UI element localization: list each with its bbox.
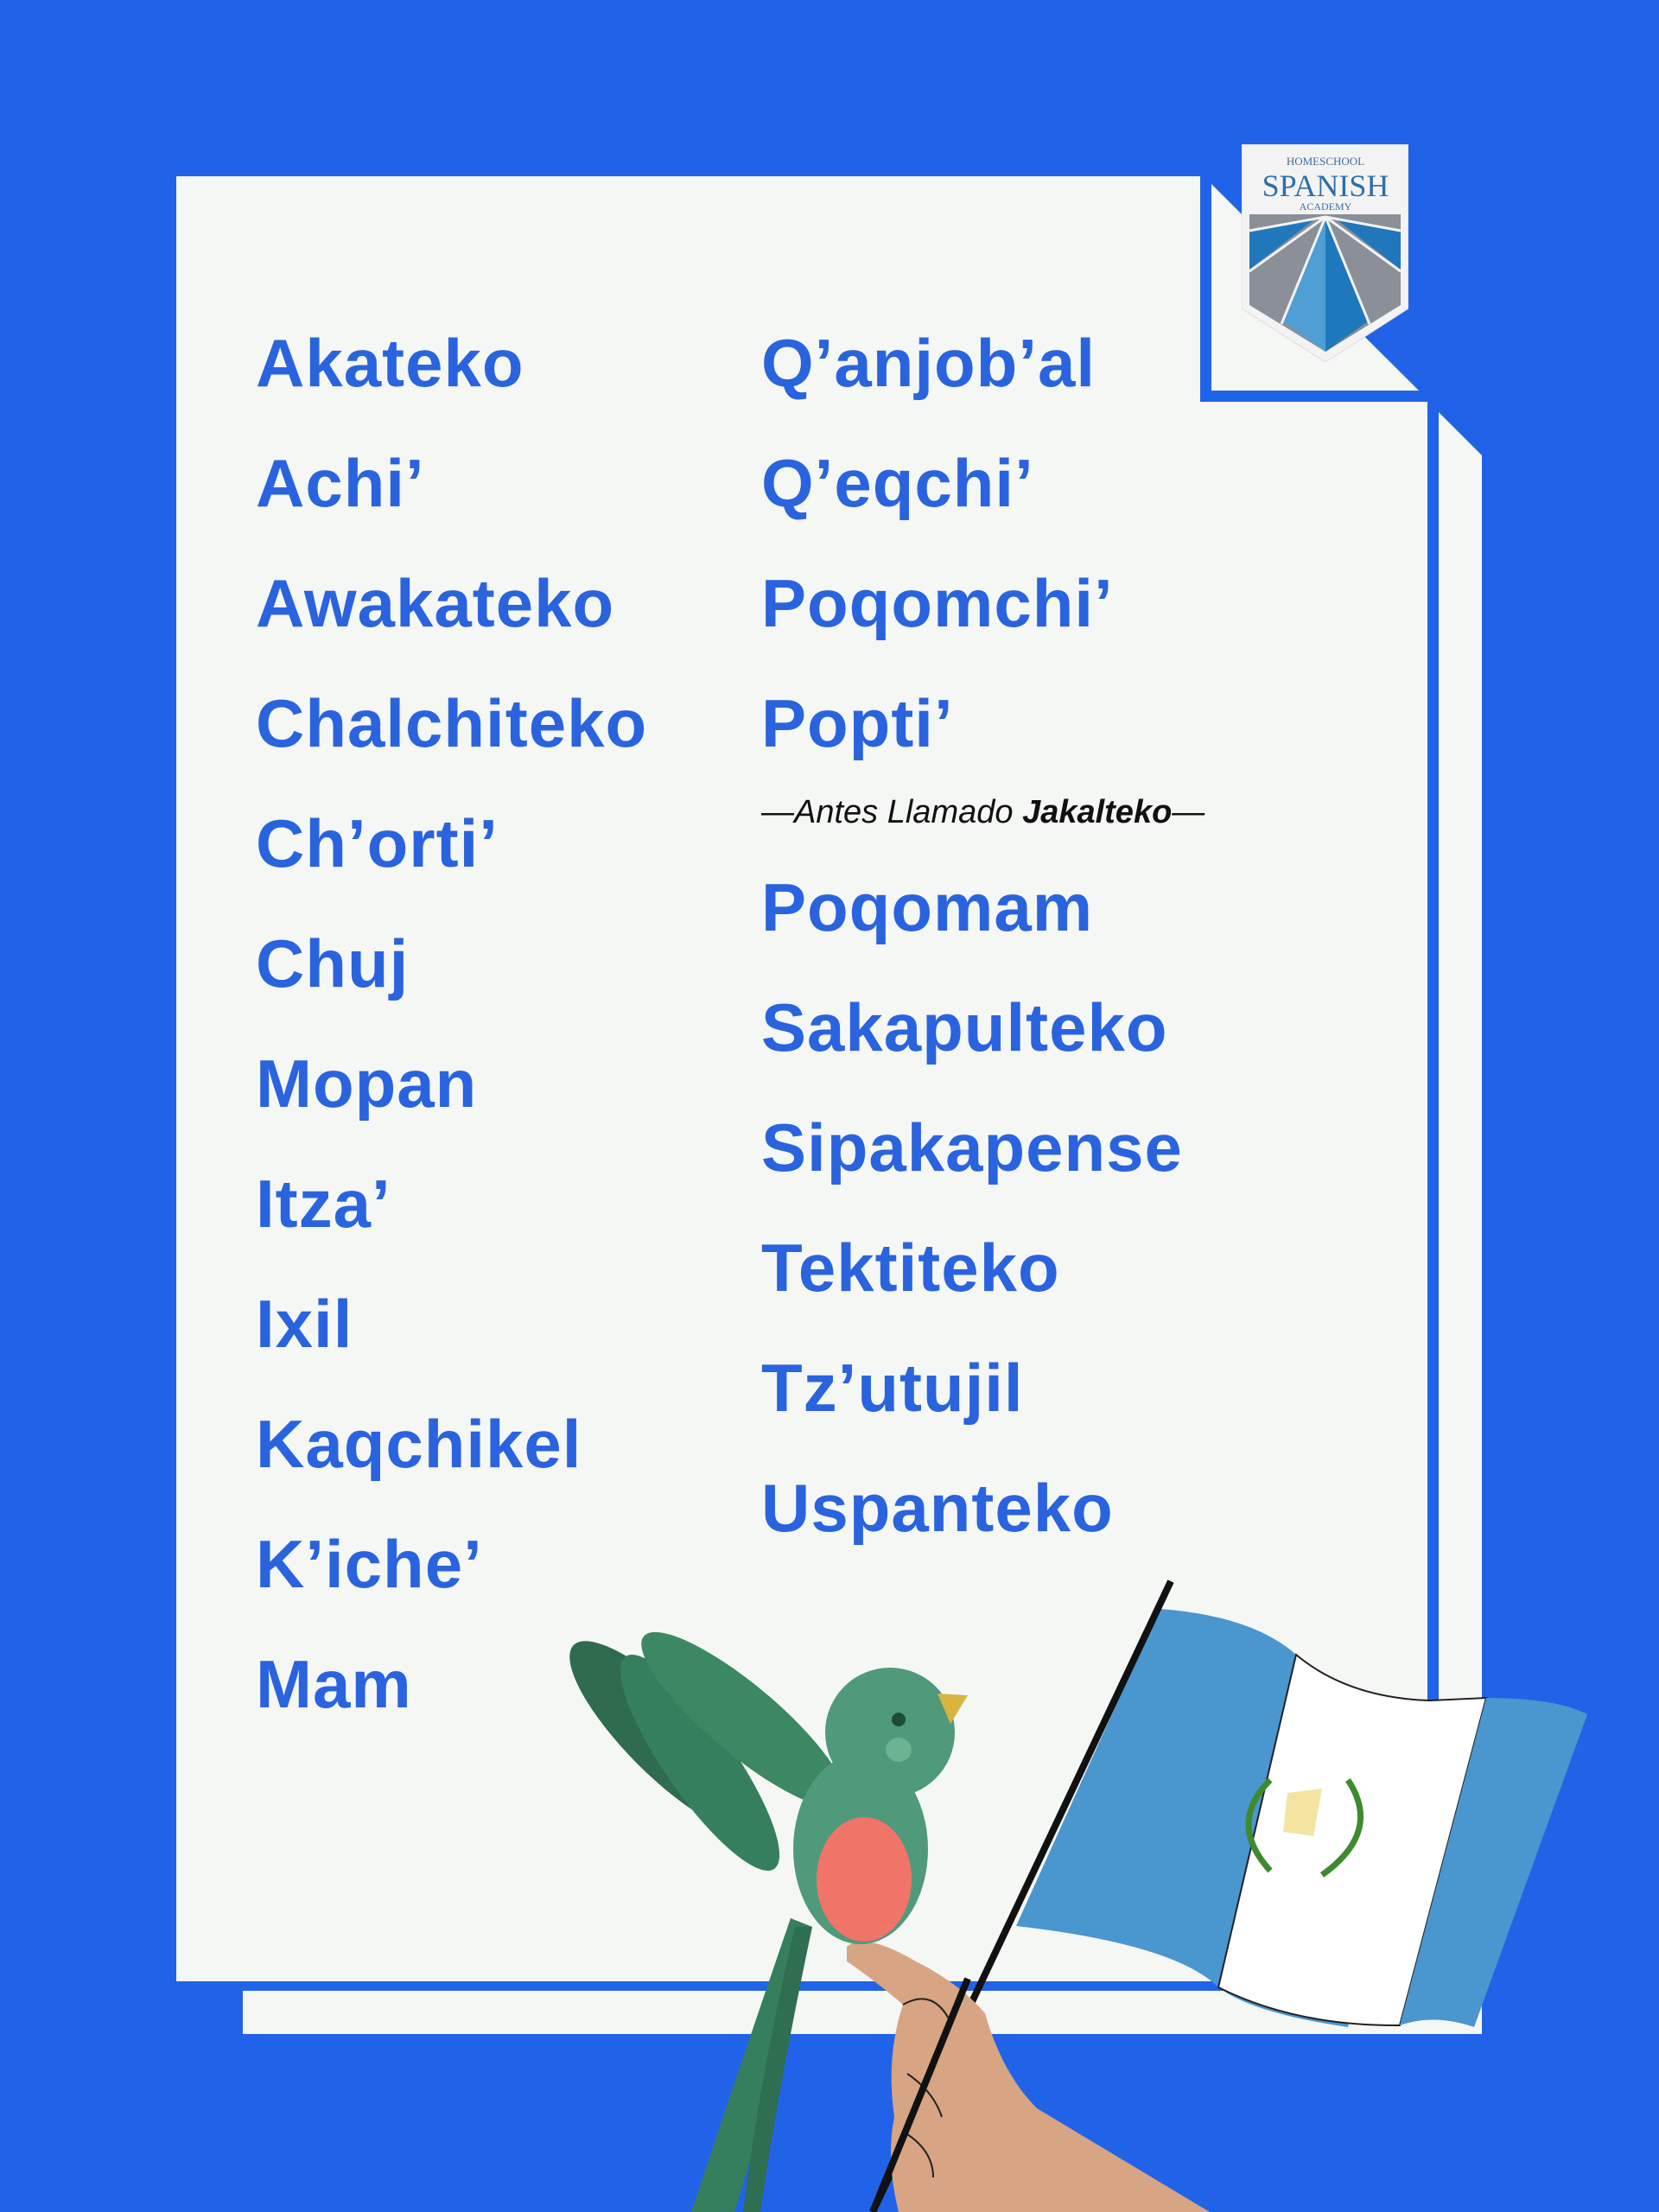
right column language list [760, 325, 1205, 1546]
note: formerly Jakalteko: —Antes Llamado Jakalteko— [761, 794, 1205, 830]
right column language list: Poqomam [761, 869, 1093, 945]
left column language list: Chuj [256, 925, 409, 1001]
logo: Homeschool Spanish Academy: ACADEMY [1300, 200, 1352, 213]
left column language list: Akateko [256, 325, 524, 401]
right column language list: Tektiteko [761, 1230, 1060, 1306]
left column language list: K’iche’ [256, 1526, 483, 1602]
flag pole [873, 1581, 1171, 2212]
front sheet [176, 176, 1427, 1981]
logo: Homeschool Spanish Academy: SPANISH [1262, 168, 1389, 203]
right column language list: Q’anjob’al [761, 325, 1096, 401]
left column language list: Ch’orti’ [256, 805, 499, 881]
left column language list: Ixil [256, 1286, 353, 1362]
logo: Homeschool Spanish Academy [1242, 144, 1408, 362]
left column language list: Mopan [256, 1046, 477, 1122]
icon: Guatemala flag [873, 1581, 1587, 2212]
right column language list: Sakapulteko [761, 989, 1168, 1065]
left column language list [256, 325, 647, 1722]
left column language list: Achi’ [256, 445, 425, 521]
right column language list: Uspanteko [761, 1470, 1114, 1546]
flag emblem [1249, 1780, 1361, 1875]
right column language list: Tz’utujil [761, 1350, 1024, 1426]
folded corner flap [1211, 184, 1419, 391]
left column language list: Awakateko [256, 565, 614, 641]
left column language list: Itza’ [256, 1166, 391, 1242]
icon: hand [847, 1942, 1210, 2212]
left column language list: Kaqchikel [256, 1406, 582, 1482]
icon: quetzal bird [546, 1610, 968, 2212]
logo: Homeschool Spanish Academy: HOMESCHOOL [1287, 155, 1364, 168]
right column language list: Sipakapense [761, 1109, 1183, 1185]
back sheet [243, 410, 1482, 2034]
right column language list: Q’eqchi’ [761, 445, 1034, 521]
right column language list: Popti’ [761, 685, 954, 761]
front sheet border [176, 176, 1439, 1991]
left column language list: Mam [256, 1646, 412, 1722]
right column language list: Poqomchi’ [761, 565, 1114, 641]
left column language list: Chalchiteko [256, 685, 647, 761]
